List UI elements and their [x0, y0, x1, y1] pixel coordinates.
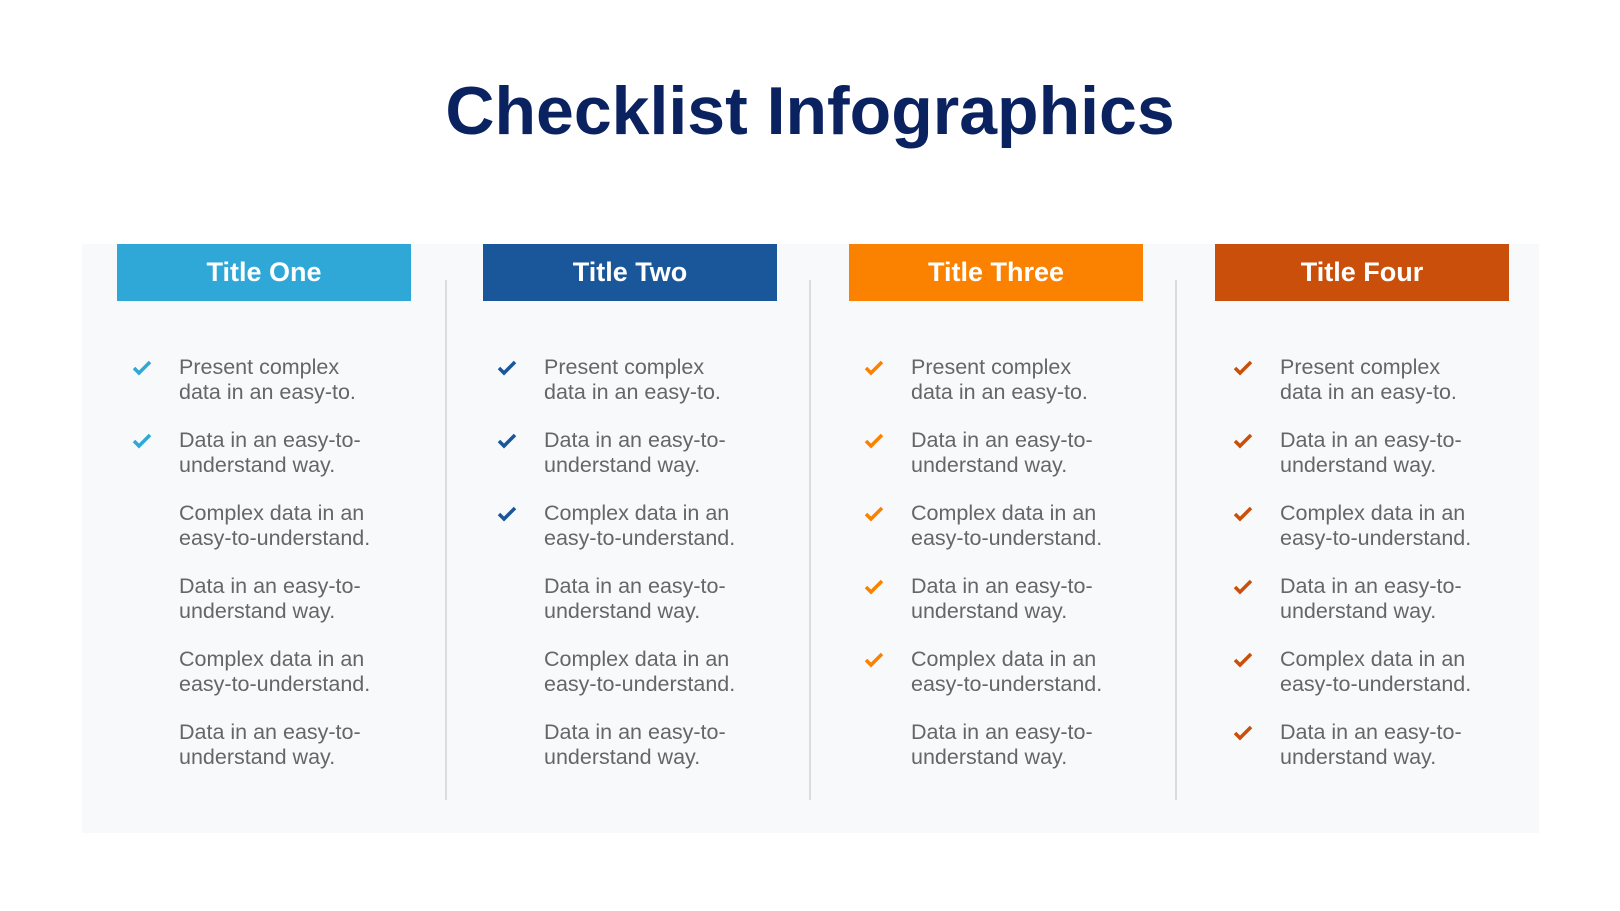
column two list: Complex data in an: [544, 647, 729, 671]
column two list: easy-to-understand.: [544, 672, 735, 696]
column one list: data in an easy-to.: [179, 380, 356, 404]
column one list: easy-to-understand.: [179, 672, 370, 696]
column two list: Complex data in an: [544, 501, 729, 525]
column four list: understand way.: [1280, 744, 1436, 768]
header: title two: Title Two: [573, 257, 687, 287]
column three list: [864, 355, 1102, 768]
column four list: Complex data in an: [1280, 501, 1465, 525]
column one list: understand way.: [179, 598, 335, 622]
title: Checklist Infographics: [445, 73, 1175, 149]
header: title three: Title Three: [928, 257, 1064, 287]
column three list: Data in an easy-to-: [911, 428, 1093, 452]
column three list: understand way.: [911, 452, 1067, 476]
column three list: easy-to-understand.: [911, 672, 1102, 696]
column four list: Present complex: [1280, 355, 1440, 379]
header: title one: [117, 244, 411, 301]
column one list: Data in an easy-to-: [179, 720, 361, 744]
panel: background: [82, 244, 1539, 833]
column four list: Data in an easy-to-: [1280, 574, 1462, 598]
column three list: data in an easy-to.: [911, 380, 1088, 404]
column two list: data in an easy-to.: [544, 380, 721, 404]
column four list: [1234, 355, 1471, 768]
column four list: understand way.: [1280, 452, 1436, 476]
column three list: Present complex: [911, 355, 1071, 379]
column two list: Data in an easy-to-: [544, 428, 726, 452]
column four list: Data in an easy-to-: [1280, 720, 1462, 744]
column four list: data in an easy-to.: [1280, 380, 1457, 404]
column one list: easy-to-understand.: [179, 526, 370, 550]
header: title one: Title One: [206, 257, 322, 287]
column two list: [498, 355, 735, 768]
column one list: understand way.: [179, 744, 335, 768]
column four list: Data in an easy-to-: [1280, 428, 1462, 452]
column one list: Present complex: [179, 355, 339, 379]
column four list: easy-to-understand.: [1280, 672, 1471, 696]
column two list: understand way.: [544, 744, 700, 768]
header: title four: Title Four: [1301, 257, 1423, 287]
column two list: Data in an easy-to-: [544, 720, 726, 744]
column one list: understand way.: [179, 452, 335, 476]
column three list: understand way.: [911, 598, 1067, 622]
column three list: Data in an easy-to-: [911, 720, 1093, 744]
column three list: understand way.: [911, 744, 1067, 768]
column three list: Data in an easy-to-: [911, 574, 1093, 598]
column two list: Data in an easy-to-: [544, 574, 726, 598]
column three list: easy-to-understand.: [911, 526, 1102, 550]
column one list: Data in an easy-to-: [179, 428, 361, 452]
column two list: understand way.: [544, 598, 700, 622]
header: title four: [1215, 244, 1509, 301]
column four list: understand way.: [1280, 598, 1436, 622]
column three list: Complex data in an: [911, 647, 1096, 671]
header: title two: [483, 244, 777, 301]
column two list: Present complex: [544, 355, 704, 379]
column four list: Complex data in an: [1280, 647, 1465, 671]
header: title three: [849, 244, 1143, 301]
column one list: Complex data in an: [179, 647, 364, 671]
column four list: easy-to-understand.: [1280, 526, 1471, 550]
column three list: Complex data in an: [911, 501, 1096, 525]
column one list: [132, 355, 370, 768]
column two list: easy-to-understand.: [544, 526, 735, 550]
column one list: Data in an easy-to-: [179, 574, 361, 598]
column two list: understand way.: [544, 452, 700, 476]
column one list: Complex data in an: [179, 501, 364, 525]
